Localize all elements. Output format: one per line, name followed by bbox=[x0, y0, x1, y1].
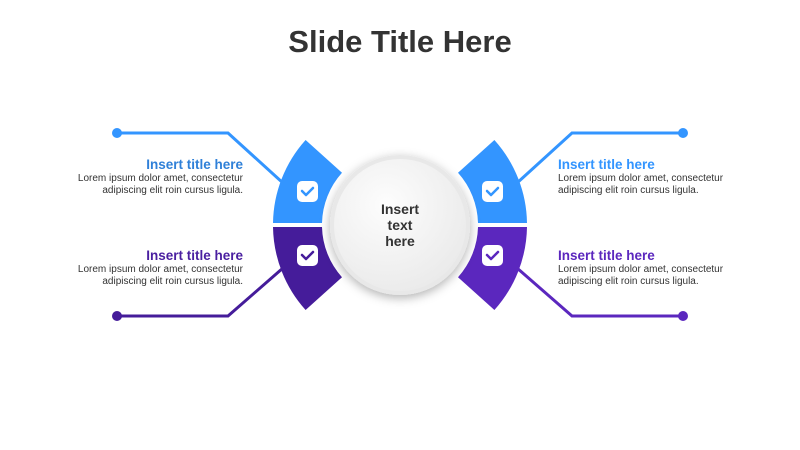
text block: bottom right bbox=[558, 248, 723, 287]
text block: bottom right: Lorem ipsum dolor amet, consectetur bbox=[558, 264, 723, 275]
title: Slide Title Here bbox=[288, 24, 512, 59]
text block: top right: Lorem ipsum dolor amet, consectetur bbox=[558, 173, 723, 184]
text block: bottom left: Insert title here bbox=[146, 248, 243, 263]
text block: bottom left: Lorem ipsum dolor amet, consectetur bbox=[78, 264, 243, 275]
segment: bottom left bbox=[273, 227, 342, 310]
center circle: text bbox=[388, 217, 413, 233]
center circle bbox=[330, 155, 470, 295]
text block: top left bbox=[78, 157, 243, 196]
text block: top right bbox=[558, 157, 723, 196]
connector: top left bbox=[112, 128, 283, 183]
text block: bottom left: adipiscing elit roin cursus ligula. bbox=[102, 276, 243, 287]
text block: top left: adipiscing elit roin cursus ligula. bbox=[102, 185, 243, 196]
text block: top left: Insert title here bbox=[146, 157, 243, 172]
center circle: here bbox=[385, 233, 415, 249]
center circle: Insert bbox=[381, 201, 419, 217]
icon: check bottom left bbox=[297, 245, 318, 266]
connector: bottom left bbox=[112, 268, 283, 321]
segment: bottom right bbox=[458, 227, 527, 310]
connector: bottom right bbox=[517, 268, 688, 321]
segment: top left bbox=[273, 140, 342, 223]
icon: check top left bbox=[297, 181, 318, 202]
icon: check bottom right bbox=[482, 245, 503, 266]
text block: bottom right: Insert title here bbox=[558, 248, 655, 263]
segment: top right bbox=[458, 140, 527, 223]
text block: bottom left bbox=[78, 248, 243, 287]
connector: top right bbox=[517, 128, 688, 183]
text block: top left: Lorem ipsum dolor amet, consectetur bbox=[78, 173, 243, 184]
icon: check top right bbox=[482, 181, 503, 202]
text block: top right: Insert title here bbox=[558, 157, 655, 172]
text block: top right: adipiscing elit roin cursus ligula. bbox=[558, 185, 699, 196]
text block: bottom right: adipiscing elit roin cursus ligula. bbox=[558, 276, 699, 287]
